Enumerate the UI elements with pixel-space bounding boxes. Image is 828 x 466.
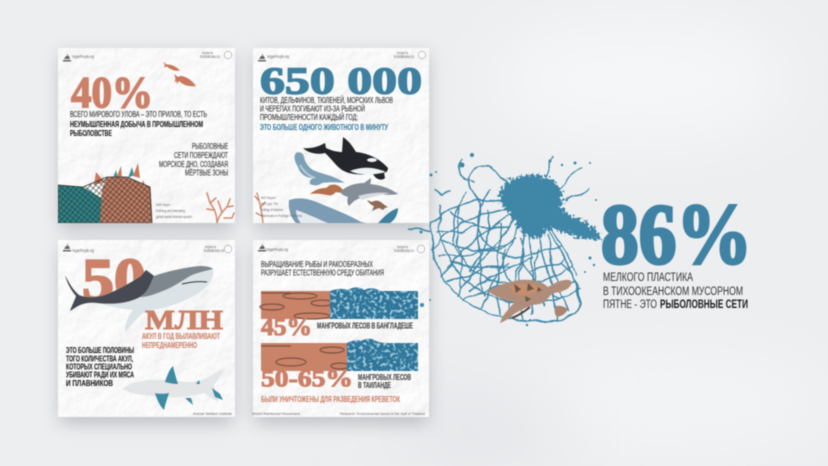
text: animals killed: ПРОМЫШЛЕННОСТИ КАЖДЫЙ ГОД: bbox=[260, 111, 358, 122]
sources: Research: Environmental issues in the Gulf of Thailand bbox=[340, 412, 425, 416]
designer mark: designed by bbox=[205, 245, 216, 249]
text: caught unintentionally: НЕПРЕДНАМЕРЕННО bbox=[142, 340, 197, 350]
text: intro bbox=[261, 259, 384, 278]
text: animals killed: КИТОВ, ДЕЛЬФИНОВ, ТЮЛЕНЕЙ, МОРСКИХ ЛЬВОВ bbox=[260, 94, 393, 105]
logo: VeganPeople.org bbox=[72, 54, 94, 59]
designer mark bbox=[394, 245, 425, 253]
designer mark: designed by bbox=[397, 51, 408, 55]
illustration: white shark bbox=[122, 366, 225, 410]
text: plastic in the garbage patch: В ТИХООКЕАНСКОМ МУСОРНОМ bbox=[603, 286, 743, 298]
illustration: whale bbox=[289, 198, 398, 223]
source: Killing of Marine bbox=[261, 208, 283, 212]
icon: fish bbox=[163, 62, 196, 86]
source: Defining and estimating bbox=[156, 209, 185, 213]
infographic canvas bbox=[52, 46, 748, 434]
designer mark: Koloskova.co bbox=[204, 248, 224, 253]
illustration: seal bbox=[295, 152, 345, 185]
logo: VeganPeople.org bbox=[267, 54, 289, 59]
text: dead zones: МОРСКОЕ ДНО, СОЗДАВАЯ bbox=[159, 159, 228, 169]
illustration: ghost fishing net bbox=[408, 153, 603, 326]
designer mark: Koloskova.co bbox=[200, 54, 220, 59]
illustration: coral bbox=[255, 193, 265, 223]
stat: 45%: 45% bbox=[261, 314, 312, 341]
logo bbox=[63, 243, 94, 253]
text: more than half: КОТОРЫХ СПЕЦИАЛЬНО bbox=[66, 362, 132, 372]
illustration: small turtle bbox=[367, 200, 388, 211]
text: plastic in the garbage patch bbox=[603, 272, 748, 311]
heading: 40%: 40% bbox=[71, 68, 153, 117]
illustration: dolphin bbox=[340, 178, 398, 206]
designer mark: designed by bbox=[397, 245, 408, 249]
source bbox=[261, 196, 302, 218]
heading: million: МЛН bbox=[145, 305, 223, 335]
text: dead zones: РЫБОЛОВНЫЕ bbox=[192, 141, 228, 151]
source: WWF Report bbox=[156, 203, 171, 207]
net tangle blob bbox=[499, 175, 603, 240]
designer mark bbox=[200, 51, 232, 59]
illustration: orca bbox=[303, 137, 388, 180]
source: Animal Welfare Institute bbox=[193, 412, 232, 416]
text: animals killed bbox=[260, 94, 393, 132]
panel: 650 000 marine animals bbox=[253, 48, 429, 223]
source: global marine fisheries bycatch bbox=[156, 215, 192, 219]
panel: 40% bycatch bbox=[58, 48, 235, 223]
logo: VeganPeople.org bbox=[266, 247, 288, 252]
designer mark bbox=[394, 51, 426, 59]
card paper bbox=[58, 240, 235, 417]
illustration: coral bbox=[207, 193, 234, 223]
text: Thailand: В ТАИЛАНДЕ bbox=[358, 380, 391, 390]
source: IWC Report: bbox=[261, 196, 276, 200]
card shadows bbox=[60, 54, 428, 423]
text: plastic in the garbage patch: ПЯТНЕ - ЭТО bbox=[603, 299, 657, 311]
logo: VeganPeople.org bbox=[72, 248, 94, 253]
net mesh bbox=[408, 155, 588, 320]
text: more than half: И ПЛАВНИКОВ bbox=[66, 378, 113, 388]
photo strip: Bangladesh bbox=[260, 287, 418, 319]
source: Mammals in Foreign Fisheries bbox=[261, 214, 302, 218]
text: destroyed for shrimp farming: БЫЛИ УНИЧТОЖЕНЫ ДЛЯ РАЗВЕДЕНИЯ КРЕВЕТОК bbox=[261, 394, 401, 404]
text: Thailand: МАНГРОВЫХ ЛЕСОВ bbox=[358, 372, 411, 382]
sources bbox=[252, 412, 425, 416]
card paper bbox=[253, 48, 429, 223]
source: Net Loss: The bbox=[261, 202, 278, 206]
text: dead zones: МЁРТВЫЕ ЗОНЫ bbox=[185, 168, 228, 178]
illustration: net with catch bbox=[58, 163, 152, 223]
card paper bbox=[253, 240, 429, 417]
stat: 50-65%: 50-65% bbox=[261, 366, 353, 392]
text: plastic in the garbage patch: РЫБОЛОВНЫЕ СЕТИ bbox=[660, 299, 748, 311]
logo bbox=[258, 243, 288, 252]
source bbox=[156, 203, 192, 219]
designer mark bbox=[204, 245, 232, 253]
heading: 650 000: 650 000 bbox=[260, 60, 422, 102]
text: plastic in the garbage patch: МЕЛКОГО ПЛАСТИКА bbox=[603, 272, 693, 284]
text: more than half: ЭТО БОЛЬШЕ ПОЛОВИНЫ bbox=[66, 345, 134, 355]
designer mark: Koloskova.co bbox=[394, 248, 414, 253]
text: more than half bbox=[66, 345, 134, 388]
card paper bbox=[58, 48, 235, 223]
text: bycatch: ВСЕГО МИРОВОГО УЛОВА – ЭТО ПРИЛОВ, ТО ЕСТЬ bbox=[70, 109, 207, 119]
text: animals killed: ЭТО БОЛЬШЕ ОДНОГО ЖИВОТНОГО В МИНУТУ bbox=[260, 122, 388, 132]
heading: 50: 50 bbox=[82, 247, 146, 313]
logo bbox=[258, 53, 289, 62]
illustration: tiger shark bbox=[65, 266, 213, 332]
text: bycatch: РЫБОЛОВСТВЕ bbox=[70, 128, 112, 138]
text: dead zones: СЕТИ ПОВРЕЖДАЮТ bbox=[174, 150, 228, 160]
designer mark: designed by bbox=[202, 51, 213, 55]
text: bycatch bbox=[70, 109, 207, 138]
text: more than half: УБИВАЮТ РАДИ ИХ МЯСА bbox=[66, 370, 134, 380]
designer mark: Koloskova.co bbox=[394, 54, 414, 59]
text: intro: РАЗРУШАЕТ ЕСТЕСТВЕННУЮ СРЕДУ ОБИТАНИЯ bbox=[261, 268, 384, 278]
photo strip: Thailand bbox=[261, 339, 418, 371]
net specks bbox=[420, 153, 597, 326]
logo bbox=[63, 53, 94, 62]
stat: 86%: 86% bbox=[601, 186, 752, 282]
illustration: turtle in net bbox=[487, 280, 571, 323]
text: more than half: ТОГО КОЛИЧЕСТВА АКУЛ, bbox=[66, 354, 133, 364]
text: animals killed: И ЧЕРЕПАХ ПОГИБАЮТ ИЗ-ЗА РЫБНОЙ bbox=[260, 102, 365, 114]
text: Thailand bbox=[358, 372, 411, 390]
sources: World Rainforest Movement bbox=[252, 412, 301, 416]
text: caught unintentionally bbox=[142, 331, 221, 350]
text: bycatch: НЕУМЫШЛЕННАЯ ДОБЫЧА В ПРОМЫШЛЕННОМ bbox=[70, 119, 203, 129]
panel: mangroves bbox=[252, 240, 429, 417]
text: Bangladesh: МАНГРОВЫХ ЛЕСОВ В БАНГЛАДЕШЕ bbox=[317, 320, 413, 330]
illustration: sea turtle bbox=[310, 185, 345, 195]
panel: 50 million sharks bbox=[58, 240, 235, 417]
text: caught unintentionally: АКУЛ В ГОД ВЫЛАВЛИВАЮТ bbox=[142, 331, 221, 341]
text: intro: ВЫРАЩИВАНИЕ РЫБЫ И РАКООБРАЗНЫХ bbox=[261, 259, 373, 269]
text: dead zones bbox=[159, 141, 228, 178]
